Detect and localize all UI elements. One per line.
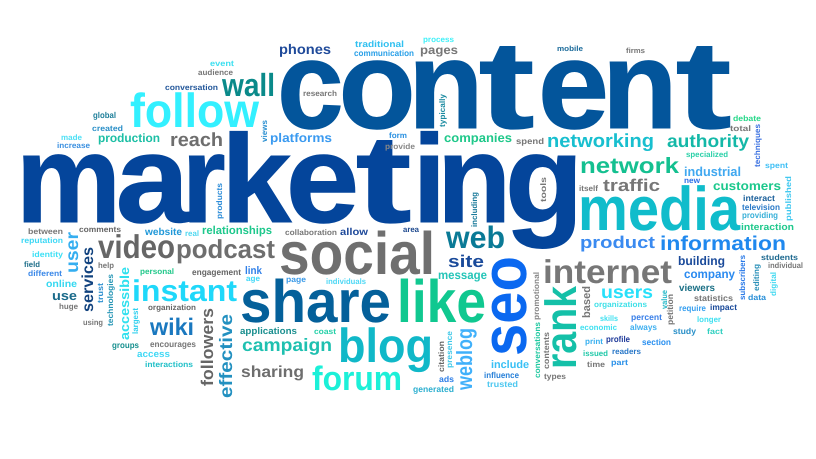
word: follow: follow xyxy=(130,85,260,138)
word: coast: coast xyxy=(314,327,336,336)
word: television: television xyxy=(742,202,780,212)
word: phones: phones xyxy=(279,41,331,57)
word: providing: providing xyxy=(742,210,778,220)
word: age: age xyxy=(246,274,261,283)
word: internet: internet xyxy=(543,253,672,290)
word: link: link xyxy=(245,265,263,277)
word: global: global xyxy=(93,110,116,120)
word: process: process xyxy=(423,35,455,44)
word: engagement: engagement xyxy=(192,267,241,277)
word: marketing: k xyxy=(221,110,292,249)
word: different: different xyxy=(28,269,62,278)
word: individual: individual xyxy=(768,261,803,270)
word: audience: audience xyxy=(198,68,234,77)
word: using: using xyxy=(83,318,103,327)
word: itself: itself xyxy=(579,184,598,193)
vertical word: based: based xyxy=(581,286,593,318)
word: wall: wall xyxy=(221,67,275,103)
word: skills: skills xyxy=(600,314,618,323)
word: created: created xyxy=(92,124,123,133)
vertical word: subscribers: subscribers xyxy=(738,254,747,300)
word: traffic: traffic xyxy=(603,176,660,195)
word: page: page xyxy=(286,275,307,284)
word: reputation: reputation xyxy=(21,236,63,245)
word: area: area xyxy=(403,225,420,234)
vertical word: user: user xyxy=(62,232,82,273)
word: content: t xyxy=(676,16,732,155)
vertical word: digital: digital xyxy=(769,272,778,296)
word: conversation: conversation xyxy=(165,83,218,92)
word: statistics: statistics xyxy=(694,293,733,303)
vertical word: published: published xyxy=(784,176,793,221)
word: marketing: r xyxy=(182,110,226,249)
word: help: help xyxy=(98,261,114,270)
word: platforms: platforms xyxy=(270,131,332,145)
vertical word: citation: citation xyxy=(437,341,446,372)
word: debate: debate xyxy=(733,114,762,123)
word: communication: communication xyxy=(354,48,414,58)
word: study: study xyxy=(673,326,696,336)
word: identity: identity xyxy=(32,250,64,259)
word: content: c xyxy=(277,16,344,155)
word: generated: generated xyxy=(413,384,454,394)
word: online: online xyxy=(46,279,77,290)
word: new: new xyxy=(684,176,701,185)
word: form: form xyxy=(389,131,407,140)
word: product: product xyxy=(580,233,655,252)
vertical word: editing: editing xyxy=(752,264,761,291)
word: content: n xyxy=(408,16,484,155)
word: include: include xyxy=(491,359,529,371)
word: podcast: podcast xyxy=(176,234,275,264)
word: interactions: interactions xyxy=(145,360,194,369)
vertical word: petition: petition xyxy=(665,294,675,325)
word: trusted: trusted xyxy=(487,379,518,389)
word: time: time xyxy=(587,360,606,369)
word: profile: profile xyxy=(606,334,630,344)
word: allow: allow xyxy=(340,227,368,238)
word: issued: issued xyxy=(583,349,608,358)
vertical word: promotional: promotional xyxy=(532,272,541,320)
word: customers: customers xyxy=(713,179,781,193)
word: message: message xyxy=(438,268,487,282)
word: rank: rank xyxy=(537,286,586,369)
word: marketing: m xyxy=(16,110,121,249)
word: video: video xyxy=(98,228,175,265)
word: authority: authority xyxy=(667,131,749,151)
vertical word: tools: tools xyxy=(539,176,548,202)
word: percent: percent xyxy=(631,312,662,322)
word: like: like xyxy=(397,268,486,335)
word: between: between xyxy=(28,227,63,236)
word: mobile: mobile xyxy=(557,44,583,53)
word: economic: economic xyxy=(580,323,618,332)
word: students: students xyxy=(761,253,799,262)
word: social: social xyxy=(279,220,435,287)
word: reach: reach xyxy=(170,130,223,151)
word: influence: influence xyxy=(484,370,519,380)
word: seo: seo xyxy=(468,256,540,356)
vertical word: technologies: technologies xyxy=(106,273,115,326)
word: use: use xyxy=(52,288,77,303)
word: company: company xyxy=(684,267,735,281)
word: comments: comments xyxy=(79,225,122,234)
word: part: part xyxy=(611,358,628,367)
word: made: made xyxy=(61,133,83,142)
word: organizations: organizations xyxy=(594,300,648,309)
word: network: network xyxy=(580,153,680,178)
vertical word: including: including xyxy=(470,192,479,227)
word: marketing: n xyxy=(437,110,511,249)
vertical word: accessible: accessible xyxy=(117,267,132,340)
word: relationships: relationships xyxy=(202,225,272,237)
word: research: research xyxy=(303,89,337,98)
word: increase: increase xyxy=(57,141,91,150)
word: data: data xyxy=(748,293,767,302)
word: sharing: sharing xyxy=(241,364,304,381)
word: longer: longer xyxy=(697,315,721,324)
word: content: o xyxy=(338,16,416,155)
word: website: website xyxy=(144,227,182,238)
word: personal: personal xyxy=(140,267,174,276)
word: viewers: viewers xyxy=(679,283,715,294)
word: interaction: interaction xyxy=(741,222,794,233)
word: groups: groups xyxy=(112,340,139,350)
word: marketing: g xyxy=(505,110,584,249)
word: forum: forum xyxy=(312,360,402,398)
word: organization: organization xyxy=(148,303,196,312)
word: media: media xyxy=(578,175,740,244)
word: instant: instant xyxy=(132,275,237,308)
word: marketing: a xyxy=(116,110,191,249)
word: site: site xyxy=(448,252,484,271)
word: information: information xyxy=(660,233,786,255)
word: total: total xyxy=(730,124,751,133)
word: building: building xyxy=(678,254,725,268)
word: section: section xyxy=(642,337,671,347)
word: content: n xyxy=(602,16,678,155)
word: marketing: i xyxy=(412,110,446,249)
word: real: real xyxy=(185,229,199,238)
word: impact: impact xyxy=(710,302,737,312)
word: spent: spent xyxy=(765,161,788,170)
vertical word: conversations: conversations xyxy=(533,321,542,378)
vertical word: followers: followers xyxy=(198,308,217,386)
word: blog: blog xyxy=(338,320,433,373)
word: production: production xyxy=(98,131,160,145)
word: event: event xyxy=(210,59,234,68)
word: fact: fact xyxy=(707,327,723,336)
word: require: require xyxy=(679,303,706,313)
vertical word: contents: contents xyxy=(542,331,551,369)
vertical word: largest: largest xyxy=(131,308,140,334)
vertical word: products: products xyxy=(215,182,224,219)
word: always: always xyxy=(630,322,657,332)
word: content xyxy=(281,46,730,130)
vertical word: presence: presence xyxy=(445,330,454,368)
vertical word: views: views xyxy=(260,119,269,142)
vertical word: trust: trust xyxy=(96,283,105,303)
word: applications: applications xyxy=(240,326,297,337)
vertical word: techniques: techniques xyxy=(753,123,762,167)
word: collaboration: collaboration xyxy=(285,228,337,237)
word: individuals: individuals xyxy=(326,277,367,286)
word: print: print xyxy=(585,337,603,346)
word: users: users xyxy=(601,282,653,302)
word: content: t xyxy=(479,16,535,155)
word: industrial: industrial xyxy=(684,164,741,179)
word: marketing: t xyxy=(356,110,412,249)
word: share: share xyxy=(240,268,391,335)
word: huge: huge xyxy=(59,302,79,311)
word: campaign: campaign xyxy=(242,335,332,355)
word: interact: interact xyxy=(743,193,775,203)
word: readers: readers xyxy=(612,347,642,356)
word: ads: ads xyxy=(439,374,454,384)
word: traditional: traditional xyxy=(355,39,404,49)
word: encourages: encourages xyxy=(150,339,196,349)
word: content: e xyxy=(538,16,609,155)
word: wiki: wiki xyxy=(149,314,194,341)
word: marketing: e xyxy=(286,110,359,249)
word: types: types xyxy=(544,372,567,381)
word: access: access xyxy=(137,349,170,360)
word: provide: provide xyxy=(385,142,416,151)
vertical word: weblog: weblog xyxy=(452,328,477,391)
word: firms: firms xyxy=(626,46,645,55)
vertical word: effective: effective xyxy=(216,314,236,398)
vertical word: typically: typically xyxy=(438,93,447,127)
word: field: field xyxy=(24,260,40,269)
word: specialized: specialized xyxy=(686,150,728,159)
word: companies: companies xyxy=(444,131,512,145)
word: spend: spend xyxy=(516,136,544,146)
word: networking: networking xyxy=(547,131,654,152)
word: pages: pages xyxy=(420,43,458,57)
vertical word: value: value xyxy=(660,289,669,309)
vertical word: services: services xyxy=(80,247,97,312)
word cloud xyxy=(22,38,802,398)
word: web: web xyxy=(445,220,505,255)
